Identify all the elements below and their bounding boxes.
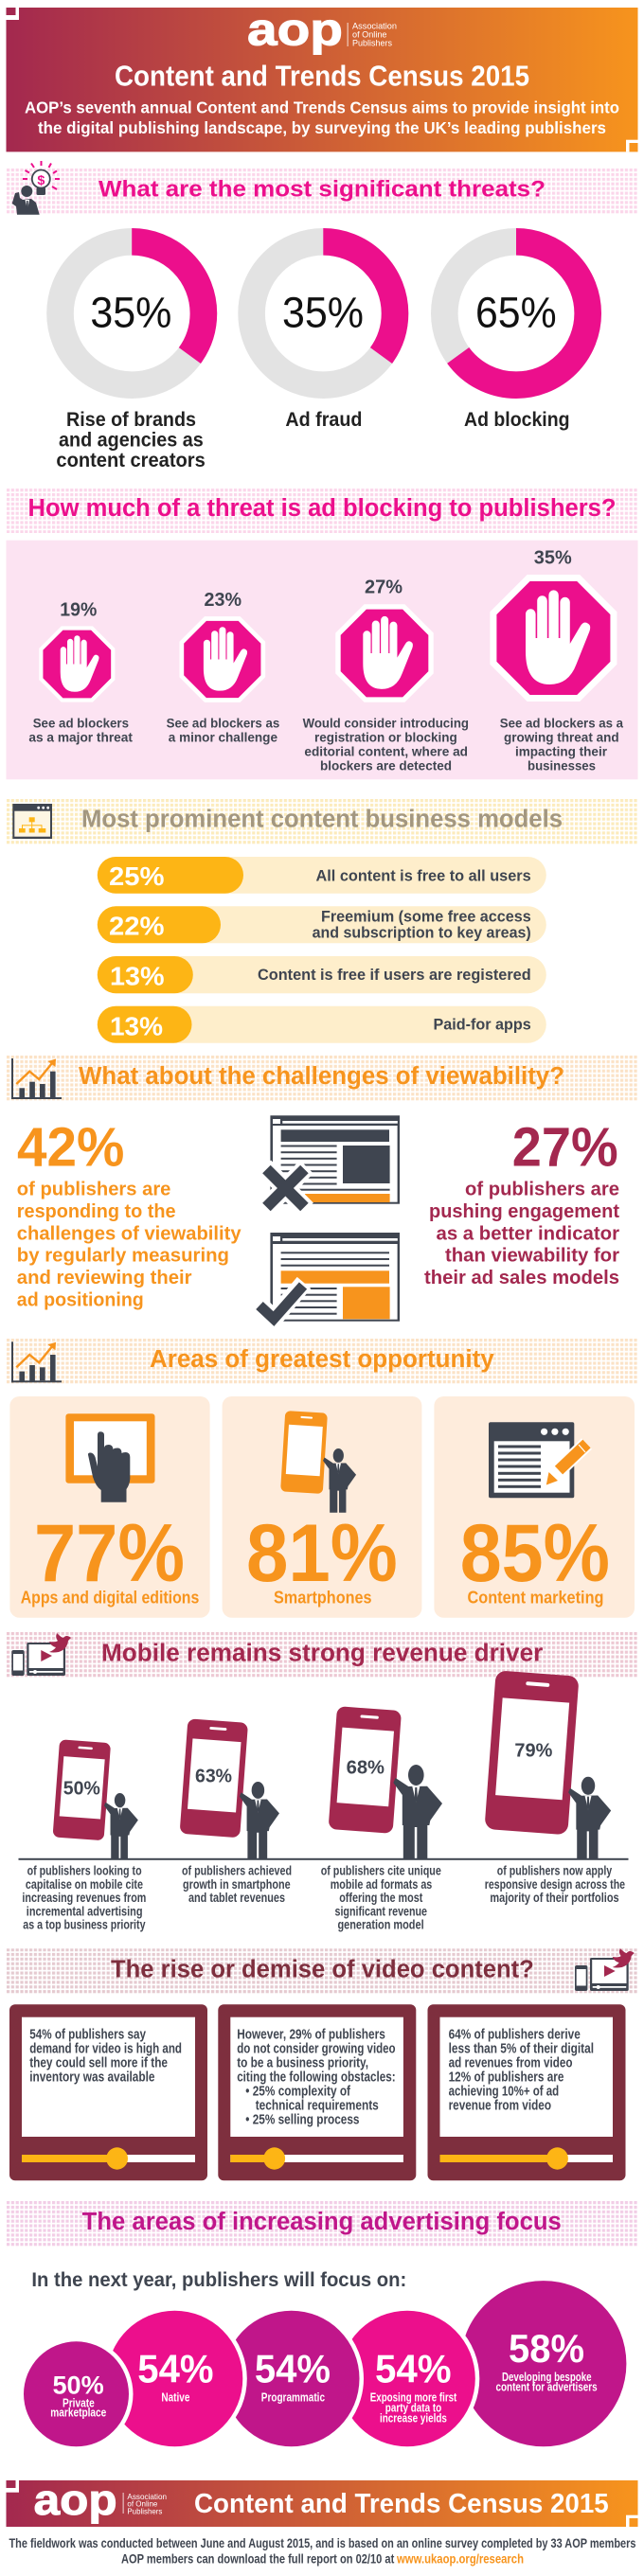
stat: 27% of publishers [424, 1117, 619, 1288]
section heading: ad blocking threat: How much of a threat is ad blocking to publishers? [28, 495, 616, 522]
bar 13% registered [98, 956, 546, 993]
panel: video player 2: • 25% complexity of [245, 2084, 350, 2099]
stat: 42% of publishers: challenges of viewability [17, 1223, 242, 1244]
caption: smartphone and tablet growth: of publishers achieved [182, 1864, 292, 1878]
stop sign 19%: 19% [60, 600, 98, 621]
bar 25% all content free [98, 857, 546, 894]
card: apps and digital editions: Apps and digital editions [21, 1588, 199, 1607]
bar 13% registered: 13% [110, 962, 165, 991]
caption: mobile advertising priority [22, 1864, 146, 1931]
panel: video player 3: revenue from video [449, 2098, 551, 2113]
donut: rise of brands 35%: 35% [90, 289, 171, 337]
bubble 50% private marketplace [24, 2341, 129, 2446]
chart: mobile phone pictograms [19, 1670, 629, 1860]
phone 50% [53, 1739, 138, 1859]
card: content marketing [434, 1396, 635, 1618]
caption: responsive design: of publishers now apply [497, 1864, 613, 1878]
section heading: video content [6, 1948, 638, 1995]
caption: mobile advertising priority: capitalise on mobile cite [26, 1877, 143, 1892]
panel: threat donut charts [56, 241, 588, 471]
stop sign 27%: blockers are detected [320, 757, 452, 773]
card: content marketing: 85% [460, 1508, 610, 1599]
card: apps and digital editions: 77% [34, 1508, 185, 1599]
phone 68% [329, 1706, 442, 1859]
stat: 42% of publishers: responding to the [17, 1201, 176, 1222]
icon: rising chart [11, 1058, 62, 1099]
panel: video player 3: achieving 10%+ of ad [449, 2084, 559, 2099]
footer AOP logo: aop [34, 2476, 117, 2524]
panel: video player 3 [428, 2004, 625, 2180]
bubble 58% bespoke content: 58% [509, 2326, 584, 2371]
bar 13% paid-for apps: Paid-for apps [434, 1016, 531, 1033]
bubble 54% first party data: party data to [385, 2401, 441, 2415]
section heading: business models [6, 799, 638, 844]
caption: responsive design [485, 1864, 625, 1905]
stop sign 35%: See ad blockers as a [500, 715, 623, 730]
phone 63% [180, 1718, 279, 1859]
icon: phone, tablet video and bird [575, 1948, 635, 1991]
caption: unique mobile ad formats: mobile ad formats as [331, 1877, 432, 1892]
panel: video player 2 [218, 2004, 416, 2180]
stop sign 19% [28, 600, 133, 744]
bar 25% all content free: All content is free to all users [316, 868, 531, 885]
phone 79% [484, 1670, 611, 1859]
panel: video player 1: they could sell more if the [29, 2055, 168, 2070]
section heading: video content: The rise or demise of video content? [111, 1956, 534, 1982]
stat: 27% of publishers: 27% [512, 1117, 618, 1179]
icon: businessman with money lightbulb: $ [37, 172, 45, 187]
card: content marketing: Content marketing [468, 1588, 604, 1607]
panel: video player 3: ad revenues from video [449, 2055, 573, 2070]
bubble 54% first party data: 54% [375, 2347, 452, 2391]
footer AOP logo: Association [127, 2492, 167, 2501]
icon: businessman with money lightbulb [12, 161, 60, 215]
bar 22% freemium [98, 906, 546, 943]
AOP logo: Association [352, 22, 397, 32]
phone 68%: 68% [347, 1756, 385, 1778]
icon: tablet with hand [65, 1413, 155, 1502]
section heading: opportunity: Areas of greatest opportunity [150, 1346, 495, 1373]
chart: overlapping focus bubbles [24, 2281, 626, 2446]
stop sign 23%: a minor challenge [169, 729, 277, 744]
ground line [19, 1858, 629, 1860]
main title: Content and Trends Census 2015 [115, 60, 529, 93]
card: smartphones [223, 1396, 421, 1618]
section heading: advertising focus [6, 2201, 638, 2247]
stop sign 23%: 23% [205, 590, 242, 611]
stop sign 35%: 35% [534, 548, 572, 569]
panel: video player 1: 54% of publishers say [29, 2027, 146, 2042]
stat: 42% of publishers [17, 1117, 242, 1310]
bubble 54% first party data: Exposing more first [370, 2390, 457, 2405]
phone 50%: 50% [63, 1778, 100, 1800]
caption: unique mobile ad formats: offering the most [339, 1891, 423, 1905]
bubble 58% bespoke content: content for advertisers [496, 2380, 598, 2394]
donut: rise of brands 35%: content creators [56, 450, 206, 471]
panel: video player 2: However, 29% of publishers [237, 2027, 385, 2042]
bubble 50% private marketplace: 50% [53, 2371, 104, 2399]
section heading: significant threats [6, 161, 638, 215]
chart: business model bars [98, 857, 546, 1043]
footer title: Content and Trends Census 2015 [194, 2489, 609, 2519]
card: smartphones: Smartphones [274, 1588, 371, 1607]
footnote text [9, 2535, 636, 2566]
stop sign 35%: businesses [528, 757, 596, 773]
bubble 54% native: 54% [137, 2347, 214, 2391]
icon: rising chart [11, 1341, 62, 1382]
stat: 42% of publishers: 42% [17, 1117, 124, 1179]
caption: mobile advertising priority: incremental advertising [27, 1904, 142, 1918]
top header banner [6, 6, 638, 151]
caption: smartphone and tablet growth: growth in smartphone [183, 1877, 291, 1892]
progress slider [230, 2147, 403, 2170]
stat: 42% of publishers: ad positioning [17, 1289, 144, 1310]
donut: ad blocking 65%: 65% [475, 289, 557, 337]
stat: 27% of publishers: as a better indicator [436, 1223, 619, 1244]
panel: video player 2: citing the following obstacles: [237, 2070, 396, 2085]
card: smartphones: 81% [246, 1508, 398, 1599]
icon: document window with pencil [489, 1422, 587, 1498]
caption: mobile advertising priority: as a top business priority [23, 1917, 146, 1931]
stop sign 27%: editorial content, where ad [304, 743, 468, 758]
panel: video player 3: 12% of publishers are [449, 2070, 564, 2085]
bar 13% paid-for apps [98, 1006, 546, 1043]
stat: 42% of publishers: and reviewing their [17, 1268, 192, 1288]
stop sign 35% [493, 548, 623, 773]
bubble 50% private marketplace: marketplace [50, 2406, 106, 2420]
panel: video player 1: demand for video is high and [29, 2041, 182, 2056]
bubble 54% programmatic: Programmatic [261, 2390, 325, 2405]
bubble 54% native: Native [161, 2390, 189, 2405]
donut: ad fraud 35% [252, 241, 395, 431]
progress slider [439, 2147, 613, 2170]
footer AOP logo [34, 2476, 167, 2524]
bar 13% registered: Content is free if users are registered [258, 967, 531, 984]
bar 22% freemium: 22% [109, 912, 165, 941]
section heading: significant threats: What are the most significant threats? [98, 176, 546, 202]
stop sign 27% [303, 577, 469, 773]
section heading: advertising focus: The areas of increasing advertising focus [82, 2209, 562, 2235]
icon: window with org chart [12, 804, 52, 839]
intro text [25, 98, 619, 137]
caption: smartphone and tablet growth [182, 1864, 292, 1905]
icon: web page with cross [264, 1115, 400, 1210]
caption: unique mobile ad formats: generation model [337, 1917, 424, 1931]
bubble 50% private marketplace: Private [63, 2396, 95, 2410]
stop sign 19%: as a major threat [28, 729, 133, 744]
AOP logo: Publishers [352, 38, 392, 48]
icon: phone, tablet video and bird [11, 1633, 71, 1676]
stop sign 23%: See ad blockers as [167, 715, 280, 730]
phone 79%: 79% [514, 1740, 552, 1762]
donut: ad fraud 35%: Ad fraud [285, 409, 362, 431]
panel: video player 1: inventory was available [29, 2070, 155, 2085]
bubble 54% first party data: increase yields [380, 2410, 447, 2425]
phone 63%: 63% [195, 1766, 232, 1787]
panel: video player 2: technical requirements [256, 2098, 379, 2113]
stat: 42% of publishers: by regularly measuring [17, 1246, 229, 1267]
section heading: mobile revenue [6, 1632, 638, 1678]
donut: rise of brands 35% [56, 241, 206, 471]
stop sign 35%: impacting their [515, 743, 608, 758]
intro text: AOP’s seventh annual Content and Trends Census aims to provide insight into [25, 98, 619, 116]
caption: unique mobile ad formats: of publishers cite unique [321, 1864, 441, 1878]
icon: web page with tick [258, 1233, 400, 1322]
bubble 58% bespoke content [460, 2281, 626, 2446]
section heading: business models: Most prominent content business models [81, 806, 563, 832]
stat: 42% of publishers: of publishers are [17, 1180, 170, 1200]
stat: 27% of publishers: their ad sales models [424, 1268, 619, 1288]
section heading: opportunity [6, 1339, 638, 1384]
stat: 27% of publishers: than viewability for [445, 1246, 619, 1267]
footnote text: www.ukaop.org/research [396, 2550, 524, 2566]
section heading: viewability: What about the challenges of viewability? [79, 1063, 564, 1090]
panel: video player 3: 64% of publishers derive [449, 2027, 581, 2042]
stop sign 27%: 27% [365, 577, 402, 598]
bubble 54% programmatic [224, 2311, 360, 2446]
bar 22% freemium: Freemium (some free access [321, 908, 531, 925]
AOP logo [247, 6, 397, 56]
bubble 58% bespoke content: Developing bespoke [502, 2370, 591, 2384]
section heading: mobile revenue: Mobile remains strong revenue driver [101, 1640, 543, 1666]
intro text: the digital publishing landscape, by surveying the UK’s leading publishers [38, 118, 606, 137]
stop sign 19%: See ad blockers [33, 715, 129, 730]
caption: unique mobile ad formats: significant revenue [335, 1904, 427, 1918]
AOP logo: aop [247, 6, 343, 56]
subheading: next year focus: In the next year, publishers will focus on: [31, 2269, 406, 2291]
stop sign 23% [167, 590, 280, 744]
caption: unique mobile ad formats [321, 1864, 441, 1931]
stop sign 27%: registration or blocking [314, 729, 457, 744]
donut: rise of brands 35%: and agencies as [59, 430, 204, 452]
bubble 54% native [107, 2311, 242, 2446]
card: apps and digital editions [9, 1396, 210, 1618]
stop sign 35%: growing threat and [504, 729, 619, 744]
caption: smartphone and tablet growth: and tablet revenues [188, 1891, 285, 1905]
stop sign 27%: Would consider introducing [303, 715, 469, 730]
section heading: ad blocking threat [6, 488, 638, 533]
footer AOP logo: of Online [127, 2499, 158, 2509]
stat: 27% of publishers: of publishers are [465, 1180, 619, 1200]
AOP logo: of Online [352, 29, 386, 40]
section heading: viewability [6, 1056, 638, 1101]
panel: ad blocking stop signs [6, 541, 638, 779]
progress slider [22, 2147, 195, 2170]
panel: video player 1 [9, 2004, 207, 2180]
donut: ad blocking 65%: Ad blocking [464, 409, 570, 431]
bar 13% paid-for apps: 13% [110, 1011, 163, 1040]
bar 22% freemium: and subscription to key areas) [313, 925, 531, 942]
bubble 54% programmatic: 54% [255, 2347, 331, 2391]
panel: video player 2: • 25% selling process [245, 2112, 360, 2127]
panel: video player 2: do not consider growing video [237, 2041, 396, 2056]
panel: video player 3: less than 5% of their digital [449, 2041, 594, 2056]
donut: ad blocking 65% [444, 241, 588, 431]
donut: ad fraud 35%: 35% [282, 289, 364, 337]
footer banner [6, 2476, 638, 2527]
panel: video player 2: to be a business priority, [237, 2055, 368, 2070]
caption: mobile advertising priority: of publishers looking to [27, 1864, 142, 1878]
bubble 54% first party data [339, 2311, 475, 2446]
caption: mobile advertising priority: increasing revenues from [22, 1891, 146, 1905]
footnote text: AOP members can download the full report on 02/10 at [121, 2550, 395, 2566]
bar 25% all content free: 25% [109, 862, 165, 891]
icon: smartphone with businessman [280, 1411, 356, 1513]
stat: 27% of publishers: pushing engagement [429, 1201, 619, 1222]
footer AOP logo: Publishers [127, 2506, 162, 2515]
donut: rise of brands 35%: Rise of brands [66, 409, 196, 431]
